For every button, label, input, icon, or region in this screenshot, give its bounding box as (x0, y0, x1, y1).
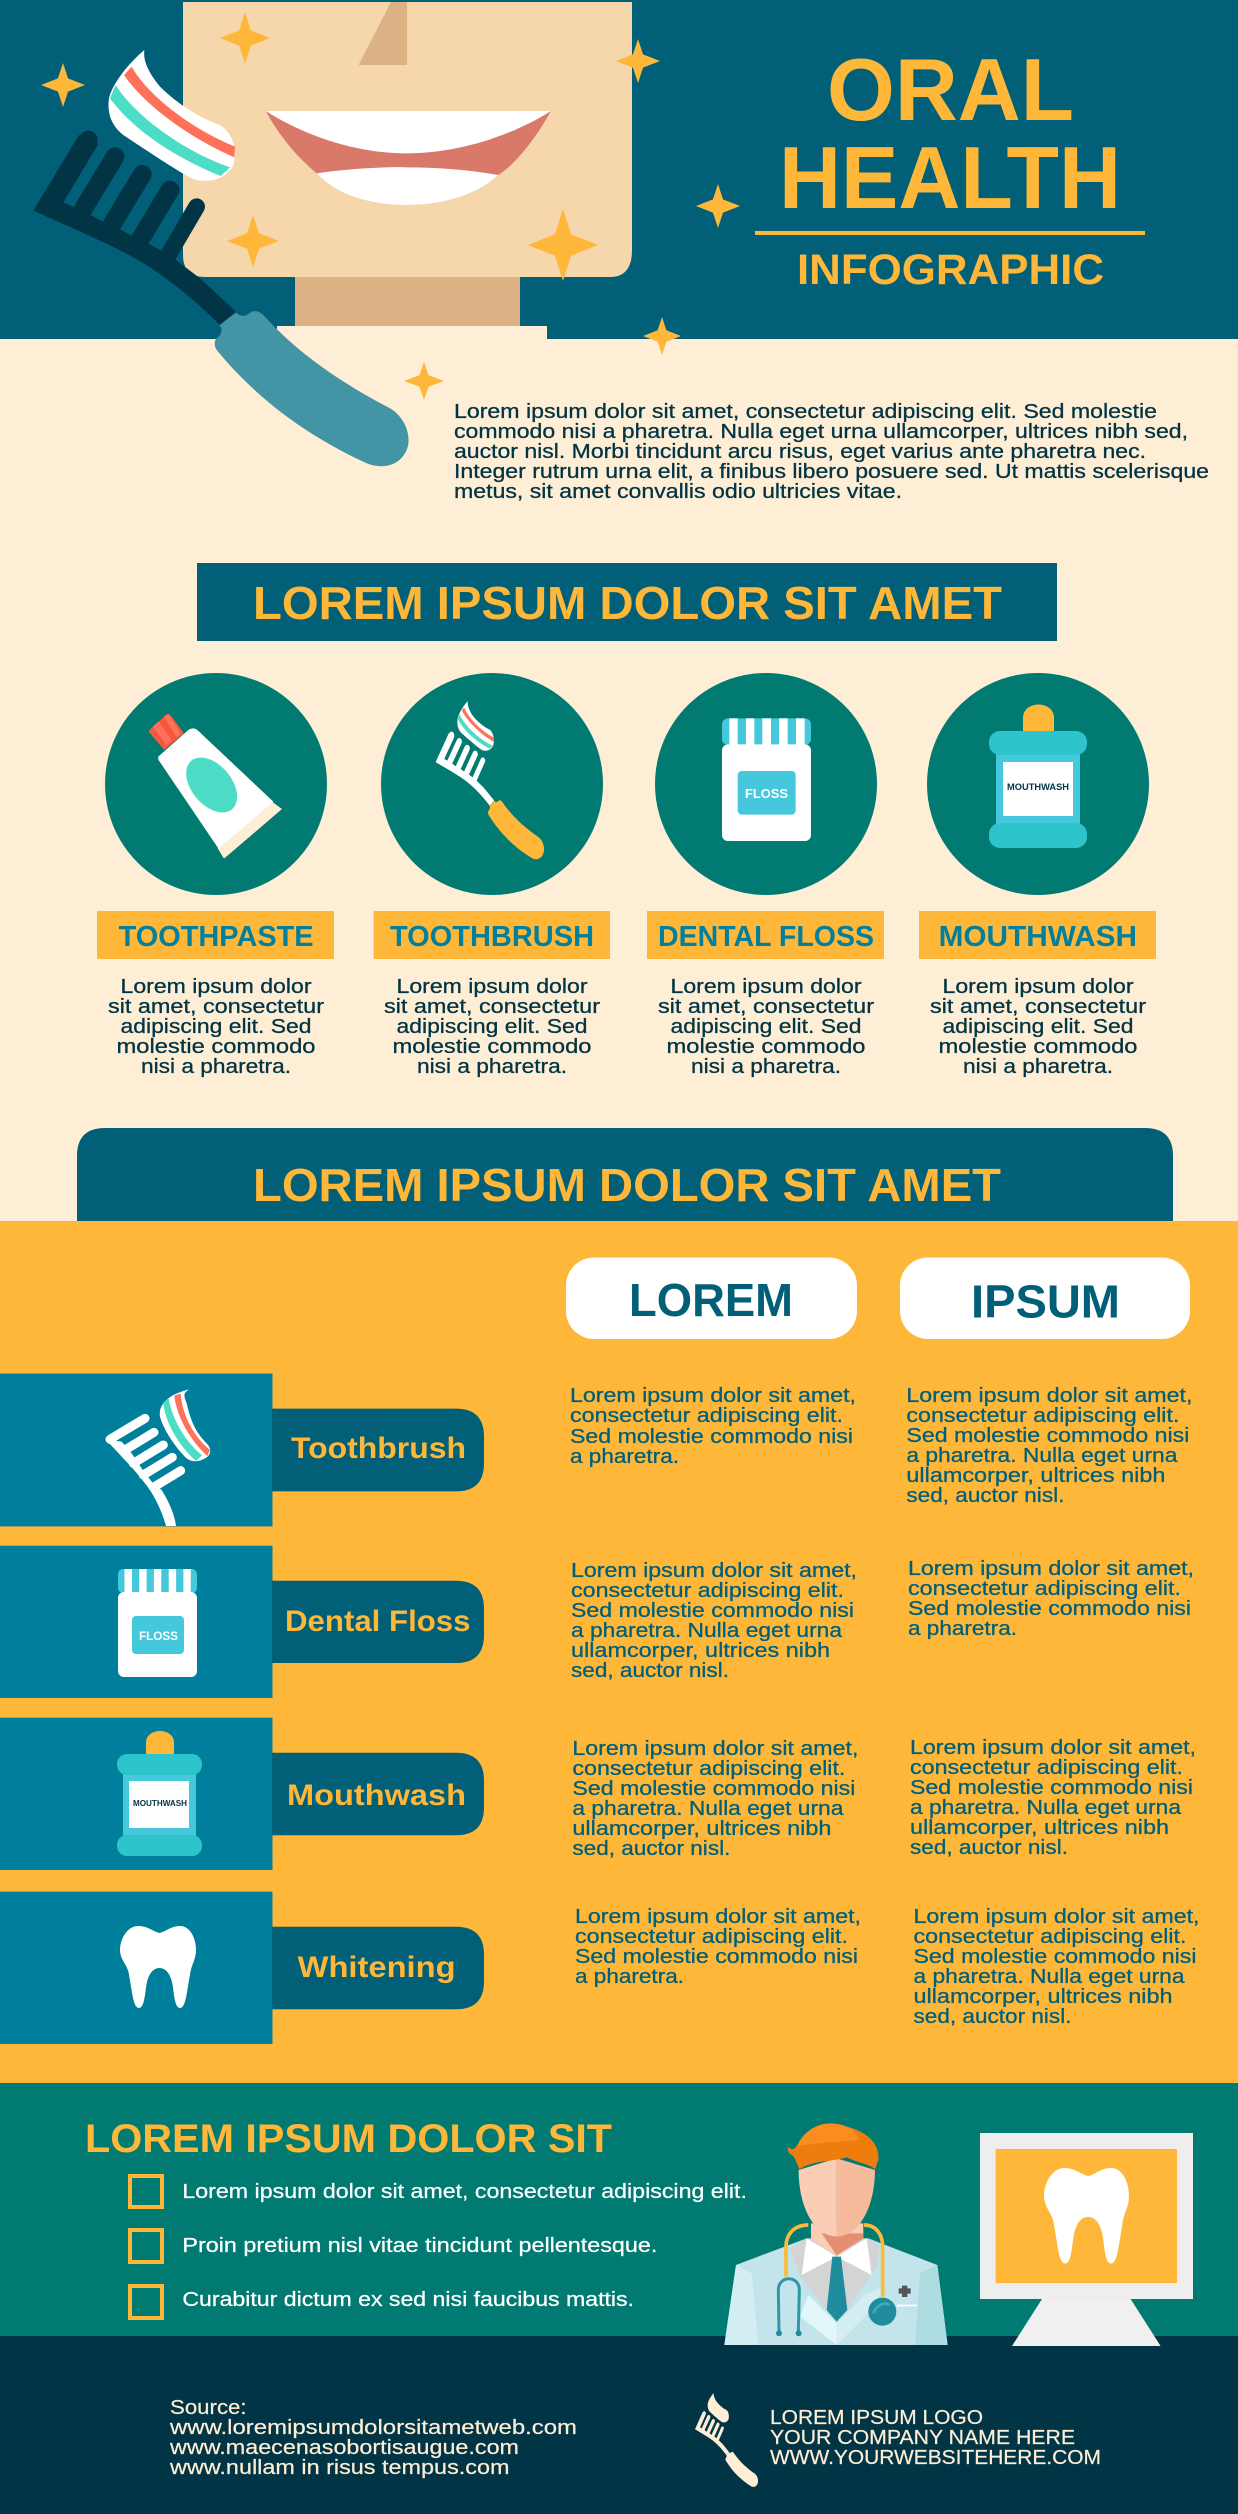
icon: tooth (0, 1892, 272, 2044)
checklist item 1 (130, 2176, 747, 2207)
icon: floss container: FLOSS (745, 786, 788, 801)
text: mouthwash description: Lorem ipsum dolor (942, 976, 1134, 998)
text: lorem column: consectetur adipiscing elit. (575, 1926, 848, 1948)
text: lorem column: ullamcorper, ultrices nibh (571, 1640, 830, 1662)
checklist item 2: Proin pretium nisl vitae tincidunt pellentesque. (182, 2235, 657, 2257)
heading: LOREM IPSUM DOLOR SIT (85, 2117, 612, 2161)
text: mouthwash description: nisi a pharetra. (963, 1056, 1113, 1078)
text: sources: www.maecenasobortisaugue.com (169, 2437, 519, 2459)
text: mouthwash description: molestie commodo (938, 1036, 1138, 1058)
illustration: smiling face (183, 2, 632, 340)
row: dental floss (0, 1546, 1194, 1698)
panel: comparison table (0, 1221, 1238, 2084)
text: toothpaste description: nisi a pharetra. (141, 1056, 291, 1078)
text: ipsum column: Lorem ipsum dolor sit amet, (914, 1906, 1200, 1928)
text: ipsum column: sed, auctor nisl. (906, 1485, 1064, 1507)
text: toothpaste description: molestie commodo (116, 1036, 316, 1058)
column header: lorem: LOREM (629, 1274, 793, 1326)
column header: lorem (566, 1258, 857, 1339)
title: ORAL (827, 40, 1074, 139)
text: logo and company: WWW.YOURWEBSITEHERE.COM (770, 2447, 1101, 2469)
checklist item 3: Curabitur dictum ex sed nisi faucibus mattis. (182, 2289, 634, 2311)
label: toothbrush: TOOTHBRUSH (390, 921, 594, 953)
text: lorem column: ullamcorper, ultrices nibh (572, 1818, 831, 1840)
text: sources (169, 2397, 577, 2479)
title: HEALTH (779, 128, 1121, 227)
label: mouthwash: Mouthwash (287, 1779, 466, 1812)
text block: intro: auctor nisl. Morbi tincidunt arcu risus, eget varius ante pharetra nec. (454, 441, 1146, 463)
text: lorem column (570, 1385, 856, 1468)
text: lorem column (575, 1906, 861, 1988)
text: lorem column: consectetur adipiscing elit. (571, 1580, 844, 1602)
table background (0, 1221, 1238, 2084)
text block: intro: Integer rutrum urna elit, a finibus libero posuere sed. Ut mattis scelerisque (454, 461, 1209, 483)
text: toothpaste description: Lorem ipsum dolor (120, 976, 312, 998)
text: toothbrush description (384, 976, 600, 1078)
icon: mouthwash bottle: MOUTHWASH (1007, 782, 1069, 792)
label: toothbrush (272, 1409, 484, 1491)
icon: sparkles (41, 12, 740, 400)
text: floss description (658, 976, 874, 1078)
column header: ipsum: IPSUM (971, 1276, 1120, 1328)
text: logo and company (770, 2407, 1101, 2469)
text: lorem column: sed, auctor nisl. (572, 1838, 730, 1860)
title: INFOGRAPHIC (797, 246, 1104, 294)
text: toothpaste description (108, 976, 324, 1078)
title (755, 40, 1145, 294)
text: floss description: nisi a pharetra. (691, 1056, 841, 1078)
panel: header (0, 0, 1238, 466)
text: lorem column: Sed molestie commodo nisi (570, 1426, 853, 1448)
text: ipsum column: Sed molestie commodo nisi (914, 1946, 1196, 1968)
icon: floss container (655, 673, 877, 895)
text: mouthwash description: sit amet, consectetur (930, 996, 1146, 1018)
green background (0, 2083, 1238, 2336)
text: ipsum column: sed, auctor nisl. (914, 2006, 1072, 2028)
icon: mouthwash bottle: MOUTHWASH (133, 1799, 187, 1808)
text: ipsum column: a pharetra. Nulla eget urna (914, 1966, 1185, 1988)
text: ipsum column: ullamcorper, ultrices nibh (914, 1986, 1172, 2008)
heading banner 1: LOREM IPSUM DOLOR SIT AMET (253, 577, 1002, 629)
text block: intro: Lorem ipsum dolor sit amet, consectetur adipiscing elit. Sed molestie (454, 401, 1157, 423)
text: toothbrush description: Lorem ipsum dolor (396, 976, 588, 998)
text: ipsum column: a pharetra. (908, 1618, 1017, 1640)
text: ipsum column: consectetur adipiscing elit. (906, 1405, 1179, 1427)
text: sources: Source: (170, 2397, 247, 2419)
icon: mouthwash bottle (0, 1718, 272, 1870)
panel: toothbrush (374, 673, 610, 1078)
text: ipsum column: Lorem ipsum dolor sit amet, (906, 1385, 1192, 1407)
text: mouthwash description (930, 976, 1146, 1078)
label: dental floss: Dental Floss (285, 1605, 470, 1638)
text: lorem column: consectetur adipiscing elit. (570, 1405, 843, 1427)
text: toothbrush description: molestie commodo (392, 1036, 592, 1058)
panel: mouthwash (919, 673, 1156, 1078)
text: lorem column: sed, auctor nisl. (571, 1660, 729, 1682)
text: ipsum column: a pharetra. Nulla eget urna (910, 1797, 1182, 1819)
text: ipsum column: consectetur adipiscing elit. (910, 1757, 1183, 1779)
label: whitening: Whitening (298, 1951, 456, 1984)
label: toothpaste (97, 911, 334, 959)
text: toothpaste description: sit amet, consectetur (108, 996, 324, 1018)
illustration: monitor with tooth (980, 2133, 1193, 2346)
icon: logo toothbrush (695, 2393, 758, 2487)
text: lorem column: Lorem ipsum dolor sit amet, (571, 1560, 857, 1582)
label: toothbrush (374, 911, 610, 959)
text: ipsum column: Sed molestie commodo nisi (908, 1598, 1191, 1620)
row: toothbrush (0, 1374, 1192, 1526)
text: ipsum column (914, 1906, 1200, 2028)
text: lorem column: Lorem ipsum dolor sit amet, (575, 1906, 861, 1928)
text: ipsum column: a pharetra. Nulla eget urna (906, 1445, 1178, 1467)
text block: intro: metus, sit amet convallis odio ultricies vitae. (454, 481, 902, 503)
panel: toothpaste (97, 673, 334, 1078)
row: mouthwash (0, 1718, 1196, 1870)
label: toothbrush: Toothbrush (291, 1432, 466, 1465)
heading banner 2: LOREM IPSUM DOLOR SIT AMET (253, 1159, 1001, 1211)
text: ipsum column (908, 1558, 1194, 1640)
text: mouthwash description: adipiscing elit. Sed (942, 1016, 1134, 1038)
icon: mouthwash bottle (927, 673, 1149, 895)
text: logo and company: LOREM IPSUM LOGO (770, 2407, 983, 2429)
text: lorem column: Sed molestie commodo nisi (571, 1600, 854, 1622)
label: mouthwash (919, 911, 1156, 959)
text: floss description: Lorem ipsum dolor (670, 976, 862, 998)
header band (0, 0, 1238, 339)
text: ipsum column: Sed molestie commodo nisi (906, 1425, 1189, 1447)
label: dental floss (272, 1581, 484, 1663)
label: dental floss (647, 911, 884, 959)
text: ipsum column (910, 1737, 1196, 1859)
text: ipsum column: consectetur adipiscing elit. (914, 1926, 1186, 1948)
text: sources: www.nullam in risus tempus.com (169, 2457, 510, 2479)
text: floss description: sit amet, consectetur (658, 996, 874, 1018)
text: ipsum column: ullamcorper, ultrices nibh (906, 1465, 1165, 1487)
text: toothpaste description: adipiscing elit. Sed (120, 1016, 312, 1038)
icon: toothpaste tube (105, 673, 327, 895)
heading banner 2 (77, 1128, 1173, 1222)
text: lorem column: consectetur adipiscing elit. (572, 1758, 845, 1780)
illustration: doctor (724, 2123, 948, 2345)
row: whitening (0, 1892, 1200, 2044)
icon: floss container (0, 1546, 272, 1698)
text: lorem column: Lorem ipsum dolor sit amet, (570, 1385, 856, 1407)
text block: intro: commodo nisi a pharetra. Nulla eget urna ullamcorper, ultrices nibh sed, (454, 421, 1188, 443)
text: sources: www.loremipsumdolorsitametweb.com (169, 2417, 577, 2439)
text: toothbrush description: adipiscing elit. Sed (396, 1016, 588, 1038)
dark background (0, 2336, 1238, 2514)
text: ipsum column: sed, auctor nisl. (910, 1837, 1068, 1859)
text: lorem column: Sed molestie commodo nisi (575, 1946, 858, 1968)
text: lorem column: a pharetra. (570, 1446, 679, 1468)
checklist item 2 (130, 2230, 657, 2262)
column header: ipsum (900, 1258, 1190, 1339)
text: toothbrush description: nisi a pharetra. (417, 1056, 567, 1078)
text: floss description: adipiscing elit. Sed (670, 1016, 862, 1038)
text: floss description: molestie commodo (666, 1036, 866, 1058)
panel: dental floss (647, 673, 884, 1078)
text: lorem column: a pharetra. Nulla eget urna (572, 1798, 844, 1820)
text: ipsum column: Lorem ipsum dolor sit amet, (908, 1558, 1194, 1580)
text: lorem column: Sed molestie commodo nisi (572, 1778, 855, 1800)
panel: footer (0, 2336, 1238, 2514)
text: logo and company: YOUR COMPANY NAME HERE (770, 2427, 1075, 2449)
text: lorem column (572, 1738, 858, 1860)
label: dental floss: DENTAL FLOSS (658, 921, 874, 953)
label: mouthwash: MOUTHWASH (939, 921, 1137, 953)
checklist item 1: Lorem ipsum dolor sit amet, consectetur adipiscing elit. (182, 2181, 747, 2203)
heading banner 1 (197, 563, 1057, 641)
text: ipsum column: consectetur adipiscing elit. (908, 1578, 1181, 1600)
text: lorem column: Lorem ipsum dolor sit amet, (572, 1738, 858, 1760)
text: ipsum column: Sed molestie commodo nisi (910, 1777, 1193, 1799)
text: lorem column: a pharetra. (575, 1966, 684, 1988)
panel: checklist (0, 2083, 1238, 2336)
text: lorem column (571, 1560, 857, 1682)
label: toothpaste: TOOTHPASTE (119, 921, 314, 953)
label: whitening (272, 1927, 484, 2009)
text: ipsum column: ullamcorper, ultrices nibh (910, 1817, 1169, 1839)
text block: intro (454, 401, 1209, 503)
icon: white toothbrush head (0, 1374, 272, 1526)
label: mouthwash (272, 1753, 484, 1835)
text: ipsum column: Lorem ipsum dolor sit amet, (910, 1737, 1196, 1759)
text: toothbrush description: sit amet, consectetur (384, 996, 600, 1018)
icon: toothbrush (381, 673, 603, 895)
checklist item 3 (130, 2286, 634, 2318)
icon: floss container: FLOSS (139, 1629, 178, 1643)
icon: large toothbrush with toothpaste (33, 50, 409, 466)
text: lorem column: a pharetra. Nulla eget urna (571, 1620, 843, 1642)
text: ipsum column (906, 1385, 1192, 1507)
